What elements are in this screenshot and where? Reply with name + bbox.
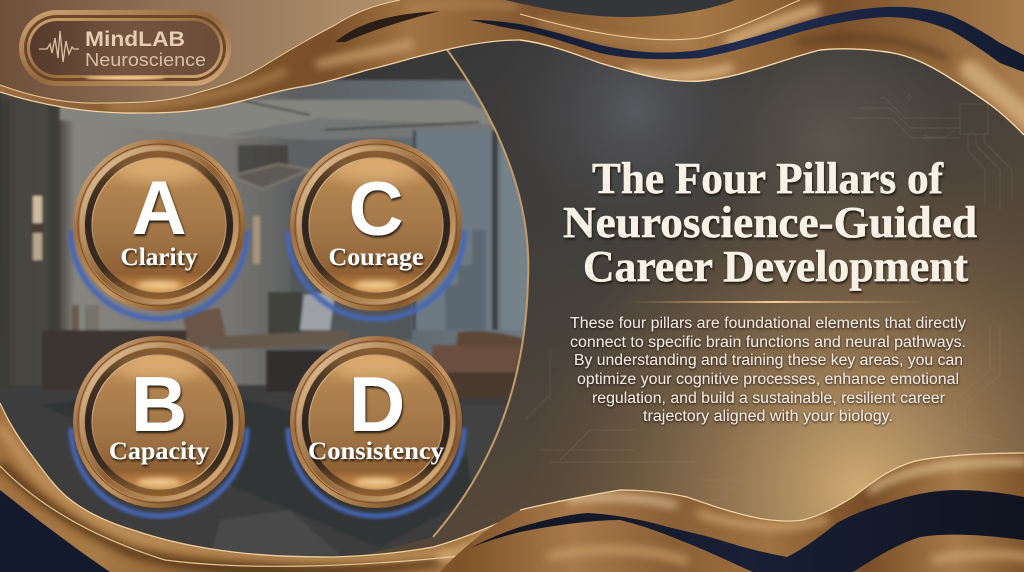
ribbon: navy stripe xyxy=(470,490,1024,572)
medallion B: Capacity: B xyxy=(131,360,187,448)
office photo panel xyxy=(0,80,540,572)
medallion B: Capacity xyxy=(71,336,247,516)
wall sconce right xyxy=(253,216,260,264)
pendant lamp xyxy=(232,164,310,189)
ribbon: gray pocket xyxy=(505,0,735,17)
logo subtitle: Neuroscience xyxy=(85,49,206,70)
floor xyxy=(2,384,510,556)
gold highlight xyxy=(0,403,520,557)
ribbon: upper dark accent xyxy=(335,11,440,42)
sofa xyxy=(432,331,528,398)
ribbon: highlight lines xyxy=(0,0,400,103)
medallion C: Courage: Courage xyxy=(328,244,424,271)
title: Career Development xyxy=(583,242,968,291)
body paragraph: These four pillars are foundational elements that directly xyxy=(570,315,966,332)
plant xyxy=(268,292,302,334)
monitor xyxy=(300,292,335,330)
arc frame line xyxy=(433,40,528,537)
ceiling xyxy=(60,100,530,138)
body paragraph: optimize your cognitive processes, enhance emotional xyxy=(577,371,959,388)
title xyxy=(563,154,977,291)
medallion D: Consistency xyxy=(288,336,464,516)
body paragraph: trajectory aligned with your biology. xyxy=(643,408,893,425)
body paragraph: By understanding and training these key areas, you can xyxy=(574,352,963,369)
title: The Four Pillars of xyxy=(592,154,944,203)
bottom left gold ribbon xyxy=(0,400,560,572)
office chair xyxy=(182,308,228,348)
credenza xyxy=(42,330,187,390)
navy corner xyxy=(0,488,112,572)
ottoman xyxy=(468,456,484,480)
title divider xyxy=(625,301,925,303)
circuit traces xyxy=(525,95,1012,500)
body paragraph: connect to specific brain functions and neural pathways. xyxy=(570,334,966,351)
desk xyxy=(205,330,350,350)
medallion B: Capacity: Capacity xyxy=(109,438,210,465)
room walls xyxy=(0,80,540,400)
ribbon: main gold swoosh xyxy=(0,0,1024,140)
top left brown header area xyxy=(0,0,410,103)
bottom right gold ribbons xyxy=(430,450,1024,572)
logo badge xyxy=(19,10,231,86)
ribbon: navy stripe xyxy=(470,7,1024,72)
medallion D: Consistency: Consistency xyxy=(308,438,445,465)
body paragraph: regulation, and build a sustainable, resilient career xyxy=(592,390,945,407)
wood panels xyxy=(0,100,288,390)
title: Neuroscience-Guided xyxy=(563,198,977,247)
medallion A: Clarity xyxy=(71,139,247,319)
icon: brain wave xyxy=(39,31,79,62)
logo name: MindLAB xyxy=(85,28,185,51)
medallion C: Courage: C xyxy=(349,167,403,252)
medallion A: Clarity: A xyxy=(132,166,186,251)
medallion D: Consistency: D xyxy=(349,360,405,448)
medallion A: Clarity: Clarity xyxy=(120,244,198,271)
body paragraph xyxy=(570,315,966,425)
ribbon: highlight lines xyxy=(520,453,1024,521)
gold band xyxy=(0,400,560,572)
medallion C: Courage xyxy=(288,139,464,319)
wall sconce left xyxy=(31,196,44,260)
window xyxy=(290,130,532,340)
top gold ribbons xyxy=(0,0,1024,140)
